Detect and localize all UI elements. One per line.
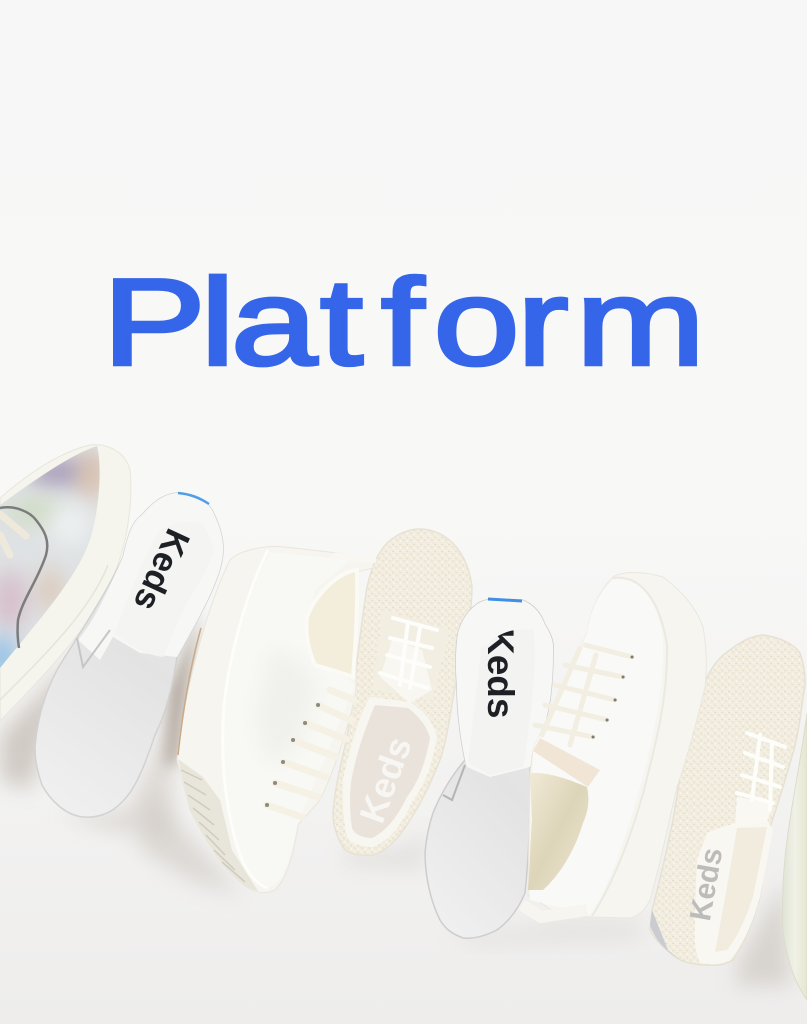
holographic upper — [0, 446, 100, 668]
logo: Keds — [684, 845, 729, 923]
platform sole — [177, 547, 373, 893]
shoe: white leather slip-on, centre — [425, 599, 553, 938]
insole — [468, 627, 535, 775]
collar lip — [462, 618, 540, 648]
heel tread — [178, 759, 258, 891]
shoe shadows — [0, 610, 790, 985]
eyelets — [267, 705, 318, 805]
blue heel tab — [488, 599, 522, 601]
collar — [456, 600, 553, 777]
shoe: white leather slip-on — [35, 493, 223, 817]
tongue tip — [533, 738, 600, 787]
tongue — [735, 797, 773, 826]
midsole line — [592, 578, 667, 916]
logo: Keds — [126, 523, 197, 617]
tread lines — [181, 770, 245, 882]
infographic canvas — [0, 274, 807, 1024]
canvas upper — [530, 579, 663, 915]
shoe: white canvas platform — [177, 547, 373, 893]
heel tab — [522, 905, 587, 917]
laces — [267, 690, 354, 817]
tan sole edge — [178, 628, 201, 755]
laces — [380, 618, 437, 688]
opening rim — [695, 820, 773, 964]
laces — [535, 645, 632, 745]
midsole line — [223, 550, 268, 888]
insole — [715, 827, 767, 952]
bottom sole edge — [650, 910, 680, 960]
opening — [528, 773, 588, 890]
insole rim — [343, 697, 437, 847]
elastic gore — [443, 765, 465, 800]
logo: Keds — [351, 731, 420, 828]
opening — [306, 570, 357, 677]
eyestay seam — [0, 507, 47, 648]
shoe: cropped sole at right edge — [782, 713, 807, 1000]
logo: Keds — [480, 628, 521, 718]
title: Platform — [102, 253, 705, 391]
shoe: glitter sneaker, right — [650, 635, 805, 965]
platform sole — [528, 572, 706, 918]
sole — [0, 445, 131, 721]
shoe: white canvas platform, right — [522, 572, 706, 918]
shoe: holographic platform — [0, 440, 131, 721]
eyestay panel — [372, 610, 450, 700]
upper — [425, 600, 553, 938]
collar — [78, 493, 223, 660]
laces — [737, 733, 785, 810]
sole ridges — [0, 565, 108, 700]
elastic gore — [77, 630, 110, 667]
tongue — [380, 640, 432, 703]
upper shading — [255, 650, 318, 765]
blue heel tab — [178, 493, 209, 504]
shoe: glitter sneaker — [333, 529, 472, 855]
upper — [35, 493, 223, 817]
insole — [115, 522, 213, 657]
eyelets — [593, 657, 632, 737]
glitter body — [650, 635, 805, 965]
heel tab — [335, 556, 373, 560]
canvas upper — [224, 552, 355, 886]
glitter body — [333, 529, 472, 855]
insole — [350, 705, 430, 838]
laces — [0, 514, 26, 555]
